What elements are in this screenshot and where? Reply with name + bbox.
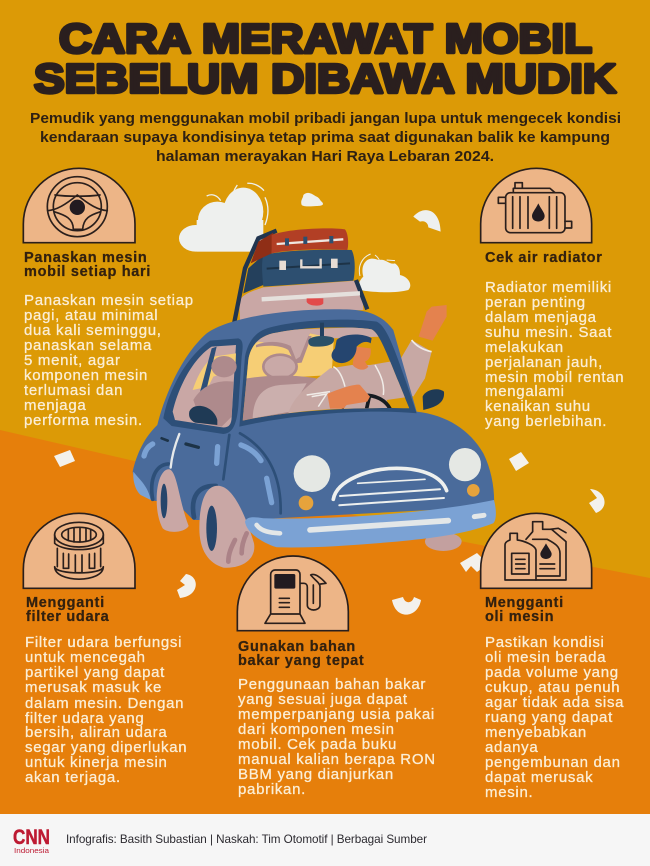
body text: 5 menit, agar bbox=[24, 352, 121, 369]
waving arm outside the car bbox=[390, 340, 432, 397]
hood lines and door seams bbox=[152, 433, 281, 517]
body text: perjalanan jauh, bbox=[485, 354, 603, 371]
front wheel bbox=[199, 486, 254, 568]
heading: bakar yang tepat bbox=[238, 653, 364, 669]
headlights bbox=[294, 448, 481, 492]
body text: segar yang diperlukan bbox=[25, 739, 187, 756]
body text: memperpanjang usia pakai bbox=[238, 706, 435, 723]
body text: oli mesin berada bbox=[485, 649, 606, 666]
heading: Panaskan mesin bbox=[24, 250, 147, 266]
grille bbox=[333, 468, 447, 505]
panel: steering wheel tip bbox=[23, 168, 194, 429]
body text: merusak masuk ke bbox=[25, 679, 162, 696]
driver torso and arm bbox=[288, 362, 405, 414]
panel: air filter tip bbox=[23, 513, 187, 786]
intro paragraph: Pemudik yang menggunakan mobil pribadi jangan lupa untuk mengecek kondisi bbox=[30, 110, 621, 127]
heading: Mengganti bbox=[485, 595, 564, 611]
credits: Infografis: Basith Subastian | Naskah: Tim Otomotif | Berbagai Sumber bbox=[66, 833, 427, 846]
icon: fuel pump bbox=[237, 556, 348, 631]
windshield interior with driver bbox=[242, 327, 410, 420]
body text: cukup, atau penuh bbox=[485, 679, 620, 696]
top suitcase bbox=[251, 228, 348, 263]
body text: Panaskan mesin setiap bbox=[24, 292, 194, 309]
roof rack straps bbox=[234, 231, 367, 324]
sleeve cuff bbox=[412, 340, 432, 352]
rear fender light panel bbox=[133, 472, 151, 500]
clouds and confetti bbox=[179, 183, 441, 292]
body text: terlumasi dan bbox=[24, 382, 123, 399]
body text: komponen mesin bbox=[24, 367, 148, 384]
body text: pagi, atau minimal bbox=[24, 307, 158, 324]
body text: manual kalian berapa RON bbox=[238, 751, 436, 768]
title bbox=[34, 16, 616, 102]
icon: steering wheel bbox=[23, 168, 135, 243]
heading: Cek air radiator bbox=[485, 250, 603, 266]
intro paragraph bbox=[30, 110, 621, 165]
body text: Pastikan kondisi bbox=[485, 634, 605, 651]
car body bbox=[133, 309, 494, 520]
panel: radiator tip bbox=[481, 168, 624, 430]
icon: radiator bbox=[481, 168, 592, 243]
confetti: scattered paper bits bbox=[54, 450, 605, 615]
intro paragraph: kendaraan supaya kondisinya tetap prima saat digunakan balik ke kampung bbox=[40, 129, 610, 146]
hand waving bbox=[419, 305, 447, 341]
logo: CNN Indonesia: Indonesia bbox=[14, 846, 50, 855]
body text: yang berlebihan. bbox=[485, 413, 607, 430]
side mirrors bbox=[189, 389, 444, 425]
body text: ruang yang dapat bbox=[485, 709, 613, 726]
seat bbox=[242, 376, 317, 423]
body text: Filter udara berfungsi bbox=[25, 634, 182, 651]
rear window view bbox=[245, 333, 334, 380]
side window bbox=[163, 338, 243, 434]
steering wheel bbox=[342, 395, 390, 409]
body text: suhu mesin. Saat bbox=[485, 324, 612, 341]
body text: menjaga bbox=[24, 397, 86, 414]
body text: pabrikan. bbox=[238, 781, 306, 798]
body text: yang sesuai juga dapat bbox=[238, 691, 408, 708]
body text: bersih, aliran udara bbox=[25, 724, 167, 741]
body text: dari komponen mesin bbox=[238, 721, 395, 738]
heading: mobil setiap hari bbox=[24, 264, 151, 280]
headrest bbox=[263, 355, 297, 379]
hands bbox=[327, 385, 370, 409]
body text: menyebabkan bbox=[485, 724, 587, 741]
body text: untuk kinerja mesin bbox=[25, 754, 168, 771]
body text: filter udara yang bbox=[25, 710, 144, 727]
body text: Penggunaan bahan bakar bbox=[238, 676, 426, 693]
body text: panaskan selama bbox=[24, 337, 152, 354]
body text: melakukan bbox=[485, 339, 564, 356]
title: CARA MERAWAT MOBIL bbox=[59, 16, 592, 62]
shirt lines bbox=[307, 365, 384, 407]
bottom suitcase bbox=[239, 281, 363, 320]
body text: partikel yang dapat bbox=[25, 664, 165, 681]
body text: mobil. Cek pada buku bbox=[238, 736, 397, 753]
intro paragraph: halaman merayakan Hari Raya Lebaran 2024. bbox=[156, 148, 494, 165]
rear wheel bbox=[157, 469, 189, 532]
body text: pada volume yang bbox=[485, 664, 619, 681]
heading: Mengganti bbox=[26, 595, 105, 611]
luggage handles and details bbox=[262, 236, 360, 306]
body text: Radiator memiliki bbox=[485, 279, 612, 296]
body text: untuk mencegah bbox=[25, 649, 146, 666]
cloud: small right bbox=[359, 254, 410, 292]
bumper bbox=[245, 500, 496, 547]
heading: oli mesin bbox=[485, 609, 554, 625]
rear view mirror bbox=[308, 323, 334, 347]
background: orange lower area bbox=[0, 430, 650, 814]
body text: dua kali seminggu, bbox=[24, 322, 162, 339]
bumper highlights bbox=[257, 515, 484, 533]
body highlights bbox=[144, 434, 272, 503]
body text: peran penting bbox=[485, 294, 586, 311]
body text: pengembunan dan bbox=[485, 754, 621, 771]
logo: CNN Indonesia bbox=[13, 826, 50, 855]
face bbox=[353, 347, 371, 370]
panel: car with luggage bbox=[133, 228, 496, 568]
cloud: large bbox=[179, 183, 268, 252]
body text: akan terjaga. bbox=[25, 769, 121, 786]
body text: performa mesin. bbox=[24, 412, 143, 429]
heading: filter udara bbox=[26, 609, 110, 625]
body text: adanya bbox=[485, 739, 538, 756]
body text: dapat merusak bbox=[485, 769, 593, 786]
windshield frame bbox=[239, 320, 417, 427]
far wheel bbox=[425, 532, 462, 551]
body text: agar tidak ada sisa bbox=[485, 694, 624, 711]
headliner bbox=[255, 328, 378, 360]
middle suitcase bbox=[243, 250, 355, 293]
icon: oil bottles bbox=[481, 513, 592, 588]
body text: mengalami bbox=[485, 383, 565, 400]
body text: mesin mobil rentan bbox=[485, 369, 624, 386]
logo: CNN Indonesia: CNN bbox=[13, 826, 50, 849]
indicator lights bbox=[299, 484, 480, 510]
confetti: top right arc bbox=[413, 210, 441, 232]
title: SEBELUM DIBAWA MUDIK bbox=[34, 56, 616, 102]
panel: footer bbox=[0, 814, 650, 866]
body text: dalam mesin. Dengan bbox=[25, 695, 184, 712]
body text: kenaikan suhu bbox=[485, 398, 591, 415]
cloud: tiny top bbox=[301, 193, 323, 206]
panel: engine oil tip bbox=[481, 513, 624, 801]
panel: fuel tip bbox=[237, 556, 436, 798]
icon: air filter bbox=[23, 513, 135, 588]
body text: mesin. bbox=[485, 784, 533, 801]
heading: Gunakan bahan bbox=[238, 639, 356, 655]
hair bbox=[332, 334, 372, 363]
body text: dalam menjaga bbox=[485, 309, 597, 326]
body text: BBM yang dianjurkan bbox=[238, 766, 394, 783]
